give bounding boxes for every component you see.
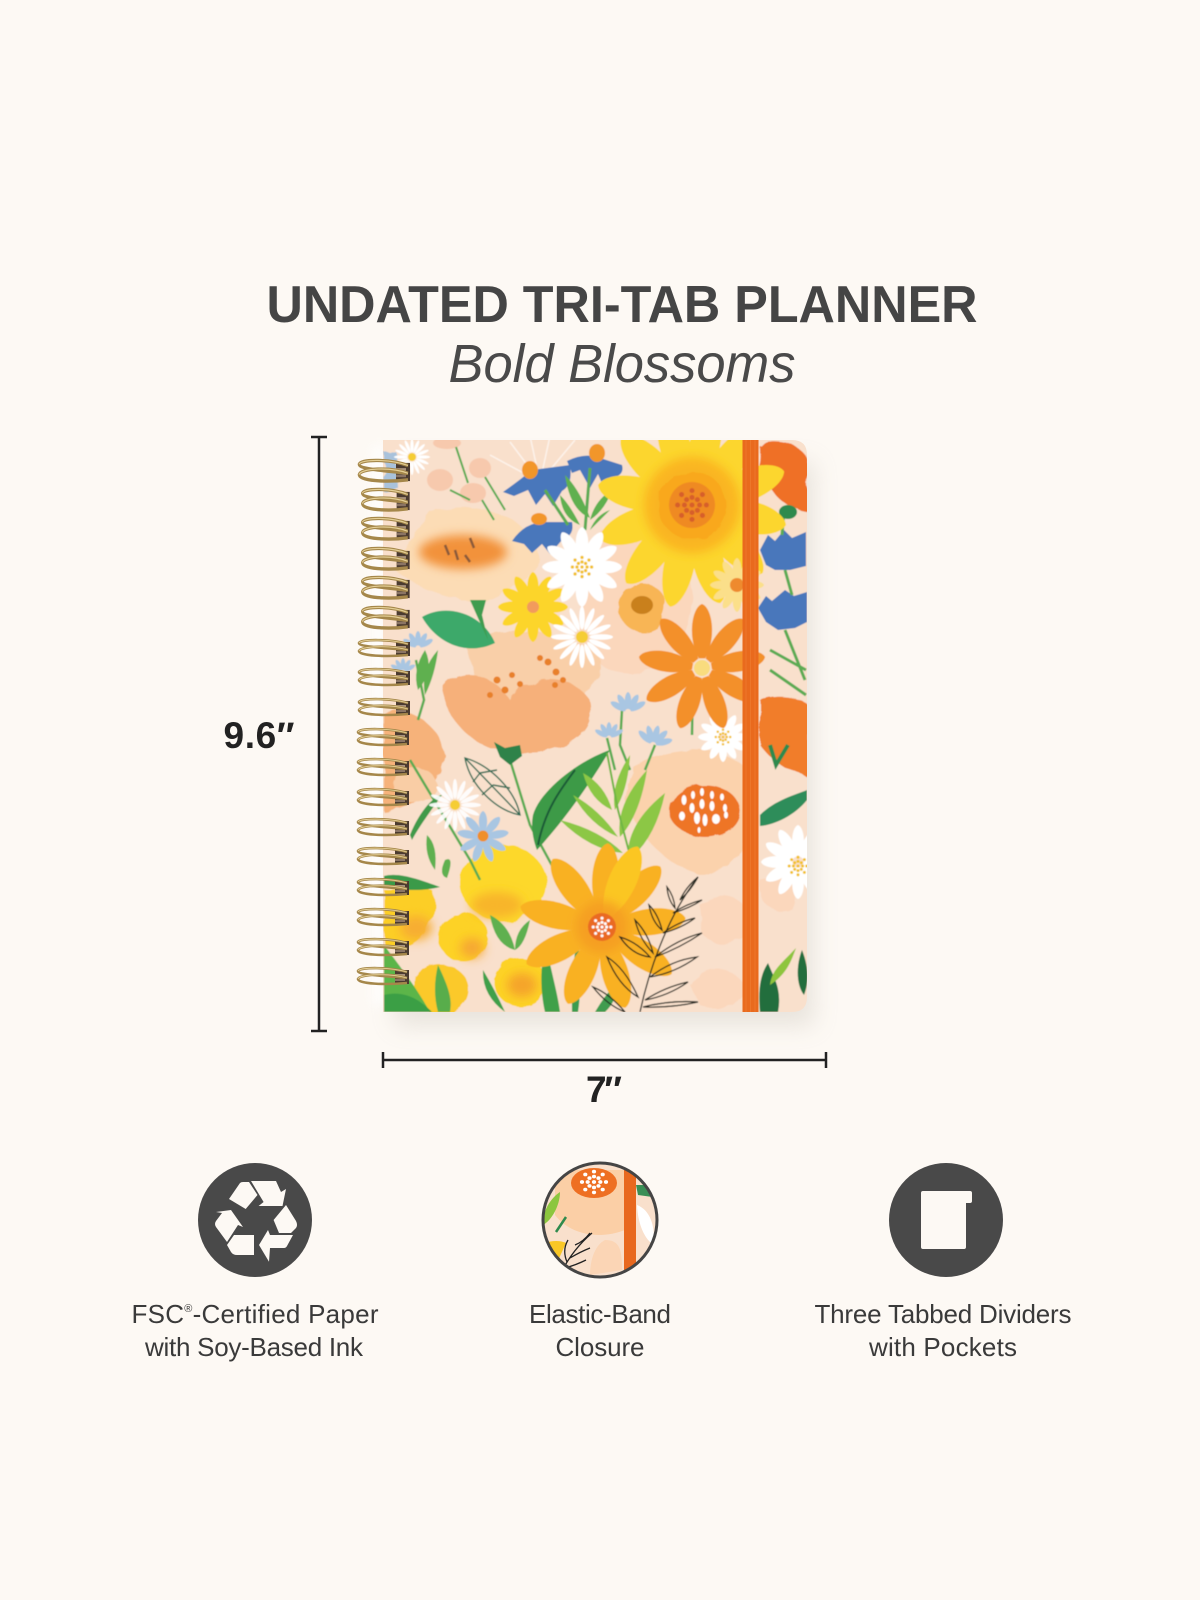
label: FSC paper: FSC: [132, 1299, 184, 1329]
feature: elastic band: [529, 1155, 671, 1362]
yellow daisy: [498, 572, 568, 642]
label: elastic band closure: [529, 1299, 671, 1362]
green calyx under tulip: [779, 505, 797, 519]
cover shadow: [395, 462, 814, 1026]
golden orange daisy: [520, 842, 686, 1008]
label: tabbed dividers with pockets: [814, 1299, 1072, 1362]
feature: tabbed dividers: [814, 1163, 1072, 1362]
blue coneflowers: [503, 456, 807, 630]
watercolor blooms: [384, 442, 809, 1015]
planner width dimension: 7″: [586, 1069, 622, 1110]
small orange-gold bloom center: [631, 596, 653, 614]
orange daisy: [637, 604, 767, 732]
black line fern: [593, 877, 702, 1012]
pale yellow daisy: [710, 558, 764, 612]
poppy orange speckles: [487, 655, 566, 698]
orange elastic band: [742, 438, 758, 1014]
icon: tabbed divider: [889, 1163, 1003, 1277]
planner height dimension: [224, 437, 327, 1031]
label: FSC paper: with Soy-Based Ink: [144, 1332, 364, 1362]
planner product illustration: [356, 440, 819, 1031]
green leaves: [532, 750, 610, 850]
planner width dimension: [383, 1052, 826, 1110]
label: tabbed dividers with pockets: with Pockets: [868, 1332, 1017, 1362]
pale blue flowers: [390, 631, 676, 863]
orange poppy seed dots: [679, 788, 728, 833]
palm fronds: [560, 755, 665, 860]
floral cover: [383, 440, 807, 1012]
planner height dimension: 9.6″: [224, 715, 295, 756]
pale small flowers and stems: [427, 437, 491, 503]
subtitle: Bold Blossoms: [448, 334, 796, 394]
white daisies: [394, 439, 835, 899]
large green leaf near poppy: [422, 611, 495, 648]
label: elastic band closure: Elastic-Band: [529, 1299, 671, 1329]
watercolor washes: [400, 535, 537, 997]
spiral binding: [358, 460, 410, 984]
faint white radial flower: [490, 440, 576, 474]
label: FSC paper: [132, 1299, 379, 1362]
label: FSC paper: -Certified Paper: [193, 1299, 379, 1329]
big yellow sunflower: [598, 440, 786, 608]
feature: recycled paper: [132, 1163, 379, 1362]
label: FSC paper: ®: [184, 1303, 192, 1315]
outlined leaf: [465, 758, 520, 815]
small stem leaves: [416, 475, 612, 950]
icon: cover detail circle: [542, 1162, 658, 1278]
icon: recycling symbol: [198, 1163, 312, 1277]
title: UNDATED TRI-TAB PLANNER: [266, 276, 978, 334]
label: elastic band closure: Closure: [556, 1332, 644, 1362]
spine highlight: [372, 446, 386, 1006]
label: tabbed dividers with pockets: Three Tabbed Dividers: [814, 1299, 1072, 1329]
